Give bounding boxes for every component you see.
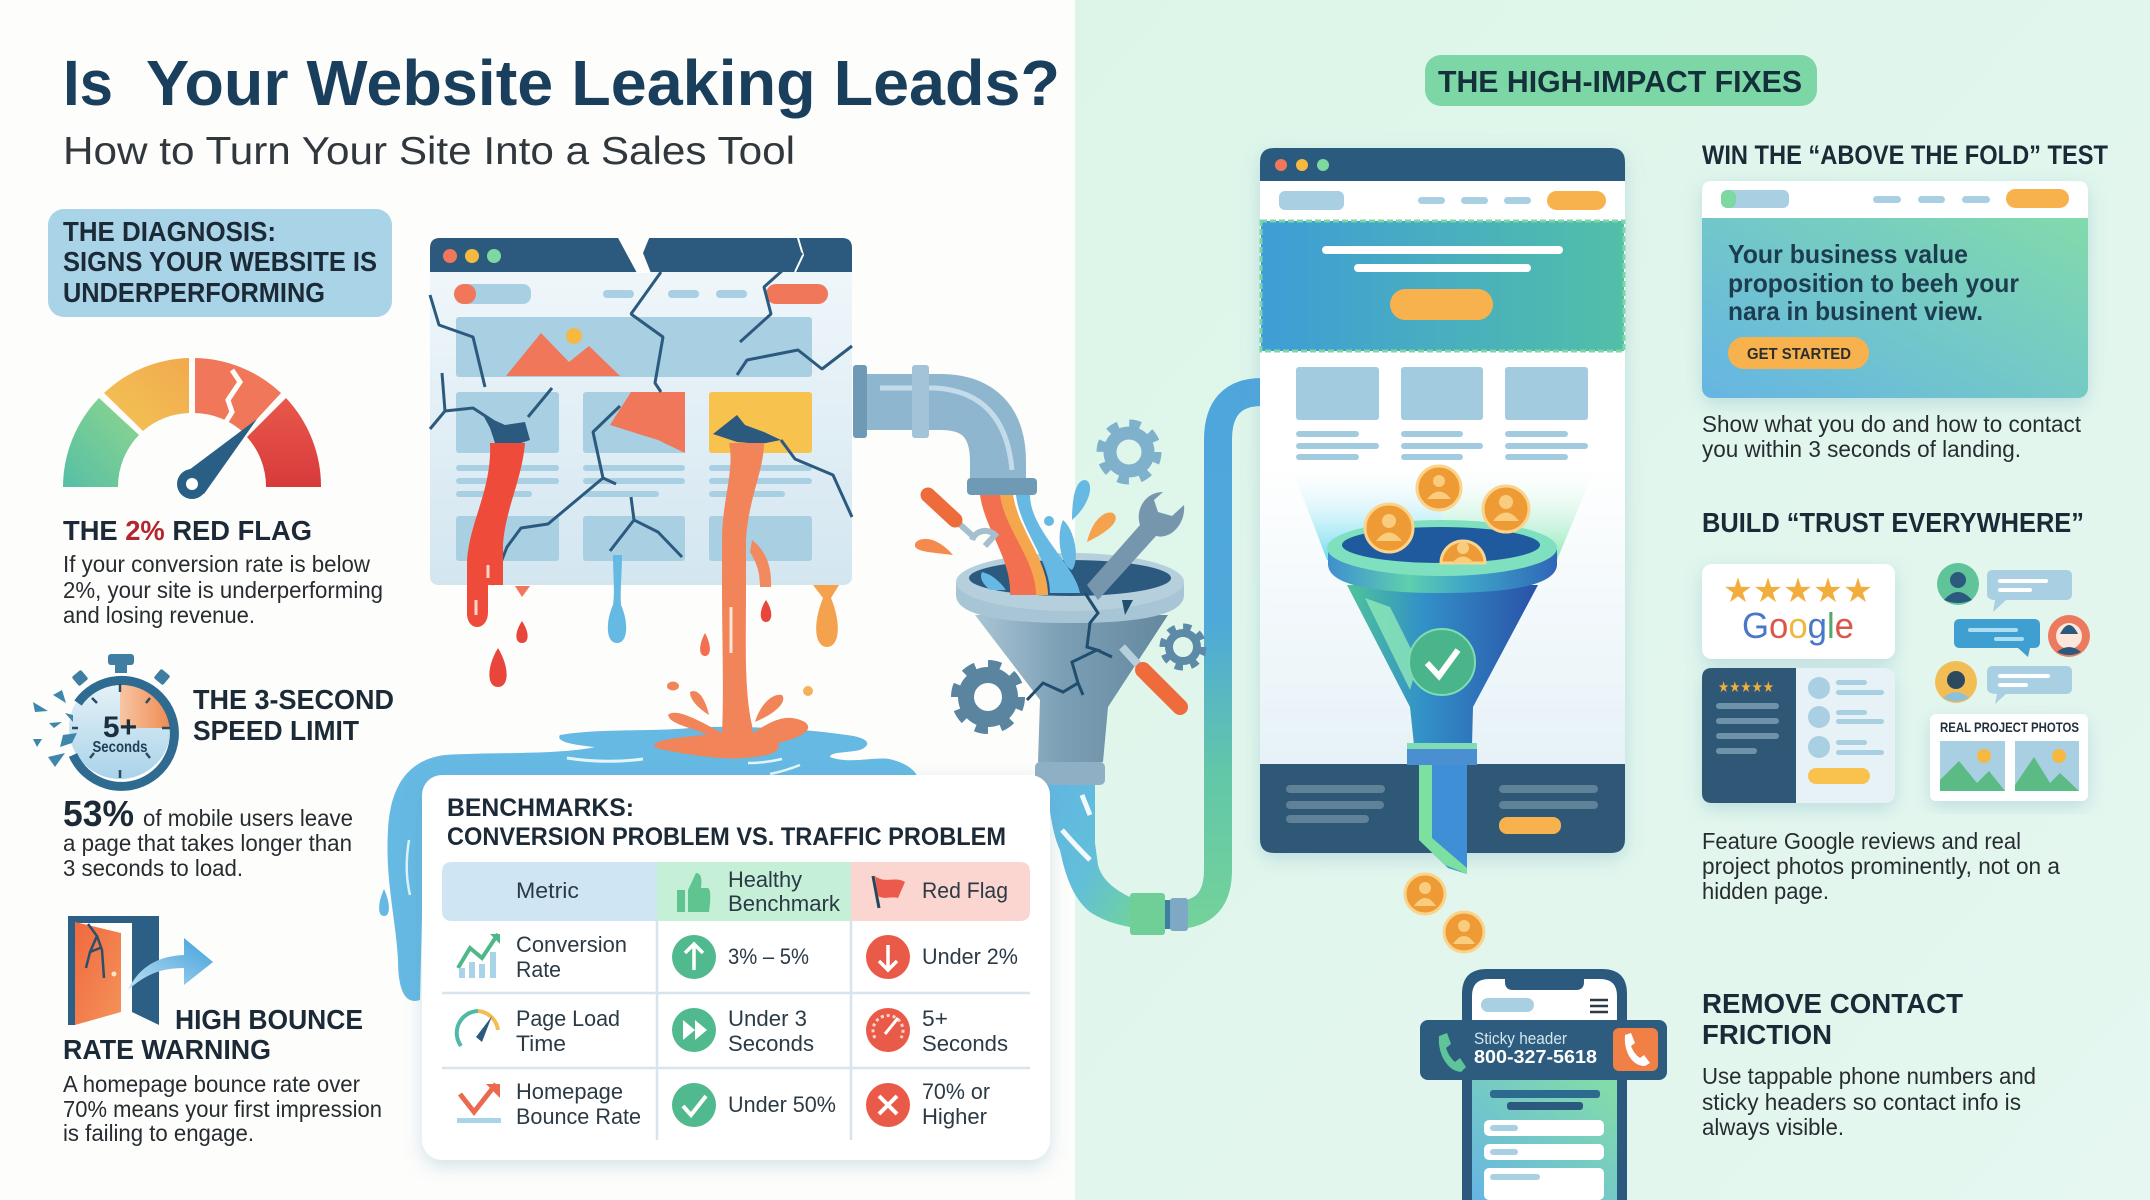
- text: remove contact friction: sticky headers so contact info is: [1702, 1089, 2021, 1115]
- illustration: fixed website: [1260, 148, 1625, 853]
- panel: diagnosis heading: SIGNS YOUR WEBSITE IS: [63, 246, 377, 277]
- table header row: Red Flag: [922, 878, 1008, 903]
- text block: high bounce warning: 70% means your first impression: [63, 1096, 382, 1122]
- text: remove contact friction: FRICTION: [1702, 1019, 1832, 1050]
- text block: 53% stat: of mobile users leave: [143, 805, 353, 831]
- red leak: [467, 443, 771, 687]
- illustration: broken browser: [430, 236, 852, 585]
- pill: fixes heading: [1425, 55, 1817, 106]
- panel: diagnosis heading: UNDERPERFORMING: [63, 277, 325, 308]
- text: trust caption: project photos prominently, not on a: [1702, 853, 2060, 879]
- water drop: [379, 889, 389, 916]
- panel: above the fold card: [1702, 181, 2088, 398]
- text block: 53% stat: [63, 793, 353, 881]
- text block: 2% red flag: and losing revenue.: [63, 602, 255, 628]
- card: google reviews: Google: [1742, 605, 1854, 646]
- button: get started: GET STARTED: [1747, 346, 1851, 363]
- text block: high bounce warning: RATE WARNING: [63, 1034, 271, 1065]
- text: remove contact friction: [1702, 988, 2036, 1140]
- icon: stopwatch: [33, 654, 174, 786]
- gear: [956, 665, 1020, 729]
- gear: [1101, 424, 1157, 480]
- icon: bounce door: [68, 916, 213, 1025]
- heading: 3-second speed limit: [193, 684, 394, 746]
- row: conversion rate: Conversion: [516, 932, 627, 957]
- row: bounce rate: 70% or: [922, 1079, 990, 1104]
- text: remove contact friction: REMOVE CONTACT: [1702, 988, 1963, 1019]
- row: page load time: Seconds: [922, 1031, 1008, 1056]
- row: page load time: [457, 1006, 1008, 1056]
- table header row: Metric: [516, 878, 579, 903]
- text: above the fold caption: you within 3 seconds of landing.: [1702, 436, 2021, 462]
- table heading: [447, 794, 1006, 851]
- table heading: BENCHMARKS:: [447, 794, 634, 822]
- text block: 2% red flag: THE 2% RED FLAG: [63, 515, 312, 546]
- callout: sticky header: Sticky header: [1474, 1029, 1567, 1048]
- row: conversion rate: [458, 932, 1018, 982]
- illustration: clean funnel: [1327, 520, 1557, 874]
- funnel light beam: [1290, 463, 1597, 560]
- row: bounce rate: Higher: [922, 1104, 987, 1129]
- text block: high bounce warning: HIGH BOUNCE: [175, 1004, 363, 1035]
- text: trust caption: hidden page.: [1702, 878, 1829, 904]
- illustration: phone: [1462, 969, 1627, 1200]
- coins falling out: [1405, 874, 1484, 952]
- illustration: cracked funnel: [956, 495, 1184, 785]
- subtitle: How to Turn Your Site Into a Sales Tool: [63, 130, 795, 173]
- icon: splash drops: [915, 480, 1116, 555]
- row: page load time: Page Load: [516, 1006, 620, 1031]
- background: diagnosis half: [0, 0, 1075, 1200]
- pipe: green return: [1175, 392, 1262, 915]
- water pool: [387, 727, 917, 1001]
- water tube: [1047, 785, 1130, 927]
- heading: trust everywhere: BUILD “TRUST EVERYWHERE”: [1702, 507, 2084, 538]
- row: conversion rate: Under 2%: [922, 944, 1018, 969]
- background: fixes half: [1075, 0, 2150, 1200]
- panel: benchmarks table: [422, 775, 1050, 1160]
- orange leak and splash: [654, 443, 839, 758]
- row: bounce rate: Homepage: [516, 1079, 623, 1104]
- row: bounce rate: Bounce Rate: [516, 1104, 641, 1129]
- title: Is: [63, 47, 113, 119]
- row: page load time: Time: [516, 1031, 566, 1056]
- panel: diagnosis heading: [48, 209, 392, 317]
- row: bounce rate: Under 50%: [728, 1092, 836, 1117]
- icon: speed gauge: [63, 358, 321, 499]
- text block: high bounce warning: A homepage bounce rate over: [63, 1071, 360, 1097]
- coins falling in: [1365, 466, 1529, 563]
- text: remove contact friction: always visible.: [1702, 1114, 1844, 1140]
- row: conversion rate: 3% – 5%: [728, 944, 809, 969]
- text block: 2% red flag: [63, 515, 383, 628]
- card: real project photos: REAL PROJECT PHOTOS: [1940, 719, 2079, 735]
- card: review page: [1702, 668, 1895, 803]
- text: above the fold caption: Show what you do and how to contact: [1702, 411, 2082, 437]
- panel: above the fold card: Your business value: [1728, 239, 1968, 269]
- blue leak: [608, 555, 626, 643]
- row: page load time: Under 3: [728, 1006, 807, 1031]
- gear: [1163, 627, 1203, 667]
- text: trust caption: [1702, 828, 2060, 904]
- table header row: Benchmark: [728, 891, 841, 916]
- panel: diagnosis heading: THE DIAGNOSIS:: [63, 216, 276, 247]
- icon: stopwatch: Seconds: [92, 739, 148, 756]
- card: google reviews: ★★★★★: [1723, 572, 1873, 610]
- text block: 53% stat: a page that takes longer than: [63, 830, 352, 856]
- card: google reviews: [1702, 564, 1895, 659]
- title: Your Website Leaking Leads?: [146, 47, 1060, 119]
- text block: 53% stat: 3 seconds to load.: [63, 855, 243, 881]
- icon: customer chat bubbles: [1935, 563, 2090, 704]
- card: review page: ★★★★★: [1718, 679, 1774, 696]
- icon: wrench: [1087, 492, 1184, 600]
- table header row: [442, 862, 1030, 921]
- pipe connector: [1130, 893, 1188, 935]
- text block: 53% stat: 53%: [63, 793, 134, 834]
- row: page load time: 5+: [922, 1006, 948, 1031]
- heading: 3-second speed limit: THE 3-SECOND: [193, 684, 394, 715]
- pipe: [853, 365, 1037, 495]
- row: bounce rate: [457, 1079, 990, 1129]
- panel: above the fold card: proposition to beeh your: [1728, 268, 2019, 298]
- text block: 2% red flag: If your conversion rate is below: [63, 551, 370, 577]
- row: conversion rate: Rate: [516, 957, 561, 982]
- heading: 3-second speed limit: SPEED LIMIT: [193, 715, 359, 746]
- text block: high bounce warning: [63, 1004, 382, 1146]
- icon: stopwatch: 5+: [103, 711, 137, 744]
- callout: sticky header: [1420, 1020, 1667, 1080]
- text block: high bounce warning: is failing to engage.: [63, 1120, 254, 1146]
- pill: fixes heading: THE HIGH-IMPACT FIXES: [1438, 64, 1802, 99]
- text: above the fold caption: [1702, 411, 2082, 462]
- card: real project photos: [1930, 714, 2088, 801]
- text: remove contact friction: Use tappable phone numbers and: [1702, 1063, 2036, 1089]
- callout: sticky header: 800-327-5618: [1474, 1047, 1597, 1067]
- icon: screwdriver: [928, 495, 1180, 707]
- button: get started: [1728, 337, 1869, 369]
- text block: 2% red flag: 2%, your site is underperforming: [63, 577, 383, 603]
- table heading: CONVERSION PROBLEM VS. TRAFFIC PROBLEM: [447, 823, 1006, 851]
- row: page load time: Seconds: [728, 1031, 814, 1056]
- table header row: Healthy: [728, 867, 802, 892]
- text: trust caption: Feature Google reviews and real: [1702, 828, 2021, 854]
- panel: above the fold card: nara in businent view.: [1728, 296, 1983, 326]
